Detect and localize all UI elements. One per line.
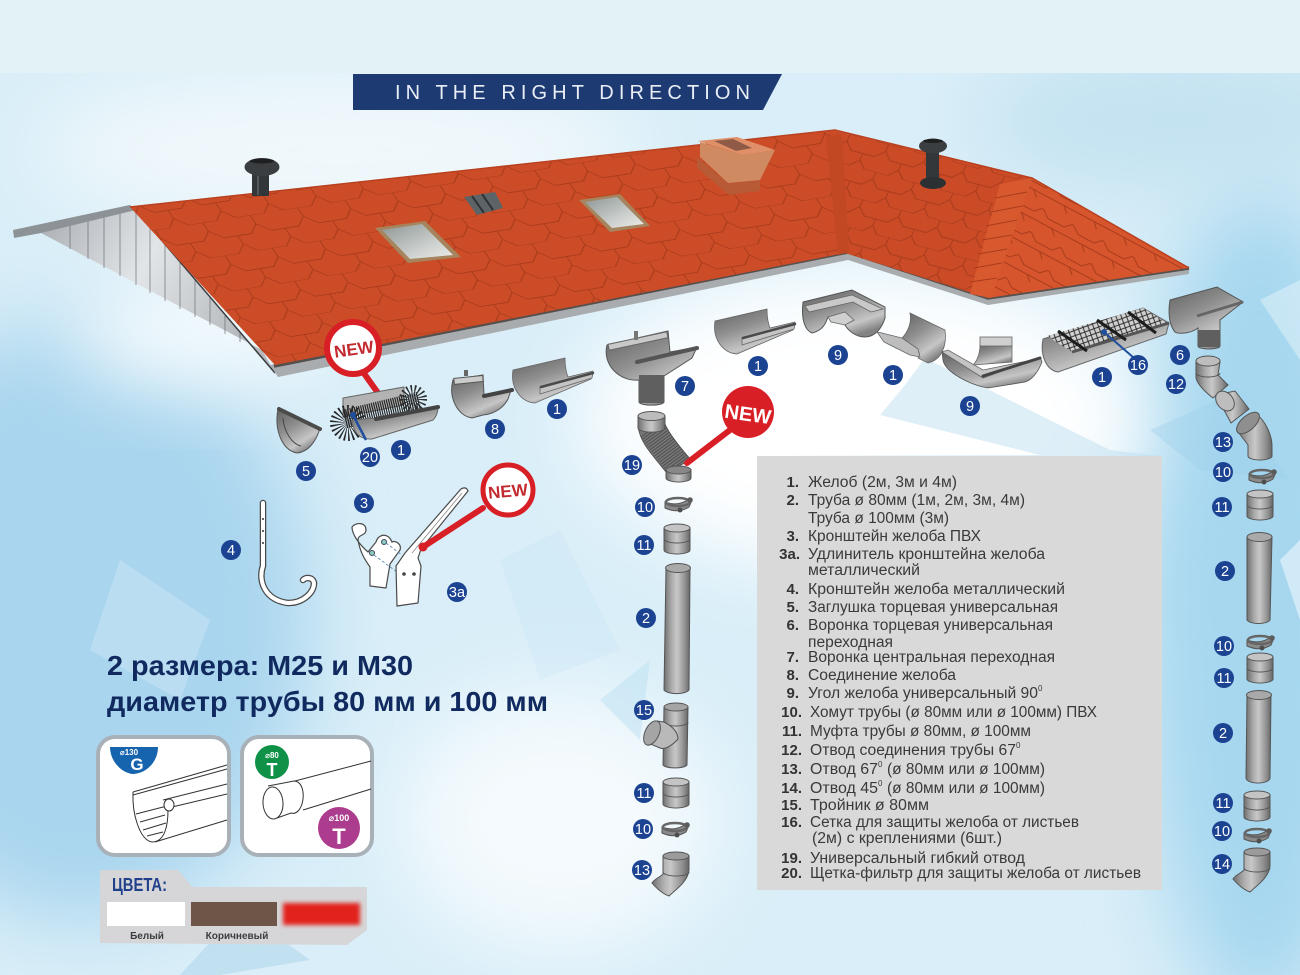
badge: G 130: G xyxy=(130,755,144,774)
badge 10 right middle: 10 xyxy=(1216,639,1232,655)
panel: parts legend: Заглушка торцевая универсальная xyxy=(808,599,1058,616)
left gable with standing seam metal xyxy=(13,205,275,373)
number badges xyxy=(221,345,1235,880)
badge: T 80 xyxy=(255,745,289,780)
panel: colours xyxy=(100,870,367,945)
panel: parts legend: Щетка-фильтр для защиты желоба от листьев xyxy=(810,865,1141,882)
badge 1 middle: 1 xyxy=(754,359,762,375)
badge 6 xyxy=(1170,345,1190,365)
badge 2 right lower xyxy=(1213,723,1233,743)
right roof vent xyxy=(919,138,947,189)
panel: parts legend: 12. xyxy=(781,742,802,759)
right column clamp middle xyxy=(1247,635,1275,650)
badge 1 net gutter: 1 xyxy=(1098,370,1106,386)
panel: parts legend: 15. xyxy=(781,797,802,814)
badge 2 right top xyxy=(1215,561,1235,581)
badge 3: 3 xyxy=(360,496,368,512)
badge 12 xyxy=(1166,374,1186,394)
panel: parts legend: Соединение желоба xyxy=(808,667,956,684)
badge: T 100 xyxy=(318,807,360,849)
panel: parts legend: 3а. xyxy=(779,546,800,563)
badge 1 brush gutter: 1 xyxy=(397,443,405,459)
panel: parts legend: Угол желоба универсальный 90 xyxy=(808,685,1038,702)
main roof slope with shingles xyxy=(130,130,845,365)
badge 16: 16 xyxy=(1130,358,1146,374)
badge 10 right lower xyxy=(1212,821,1232,841)
roof illustration xyxy=(13,130,1189,377)
PVC bracket xyxy=(352,524,402,588)
badge 13 left xyxy=(632,860,652,880)
badge 2 right lower: 2 xyxy=(1219,726,1227,742)
panel: parts legend: 1. xyxy=(786,474,799,491)
badge 10 left lower: 10 xyxy=(635,822,651,838)
left column coupling lower xyxy=(663,778,689,808)
panel: parts legend: Труба ø 100мм (3м) xyxy=(808,510,949,527)
panel: parts legend: Воронка центральная переходная xyxy=(808,649,1055,666)
angle piece right xyxy=(942,337,1042,388)
NEW badge pointing at extender: NEW xyxy=(487,480,529,503)
central funnel xyxy=(606,331,697,405)
right column downpipe upper xyxy=(1247,532,1272,624)
end cap xyxy=(277,409,320,453)
badge 15 xyxy=(634,700,654,720)
panel: parts legend: Муфта трубы ø 80мм, ø 100мм xyxy=(810,723,1031,740)
NEW badge with pointer to brush filter xyxy=(327,322,383,400)
left column coupling upper xyxy=(664,524,690,554)
NEW badge pointing at flexible elbow xyxy=(687,386,774,463)
badge 11 right top: 11 xyxy=(1214,500,1230,516)
badge 15: 15 xyxy=(636,703,652,719)
panel: parts legend: 11. xyxy=(782,723,802,740)
left column clamp xyxy=(665,497,693,512)
skylight right xyxy=(579,194,650,232)
NEW badge pointing at flexible elbow: NEW xyxy=(723,401,773,429)
left column clamp lower xyxy=(662,822,690,838)
swatch: white xyxy=(107,902,185,926)
badge 11 left lower xyxy=(634,783,654,803)
badge 8 xyxy=(485,419,505,439)
metal bracket extender xyxy=(396,488,468,606)
panel: parts legend: 19. xyxy=(781,850,802,867)
panel: parts legend: 0 xyxy=(878,760,883,769)
panel: parts legend: 0 xyxy=(878,779,883,788)
valley strip xyxy=(826,134,849,255)
badge 1 middle xyxy=(748,356,768,376)
panel: parts legend: Тройник ø 80мм xyxy=(810,797,929,814)
badge 8: 8 xyxy=(491,422,499,438)
panel: parts legend: 9. xyxy=(786,685,799,702)
heading: sizes and pipe diameters: 2 размера: M25 и M30 xyxy=(107,650,413,681)
gutter joint xyxy=(452,370,512,418)
ridge cap xyxy=(130,130,1189,268)
panel: parts legend: 8. xyxy=(786,667,799,684)
panel: parts legend: Кронштейн желоба ПВХ xyxy=(808,528,982,545)
NEW badge pointing at extender xyxy=(418,465,533,552)
flexible elbow xyxy=(638,412,691,482)
panel: parts legend: Труба ø 80мм (1м, 2м, 3м, 4м) xyxy=(808,492,1025,509)
tee fitting xyxy=(640,703,688,768)
badge 4: 4 xyxy=(227,543,235,559)
left column downpipe xyxy=(664,564,690,694)
heading: sizes and pipe diameters: диаметр трубы 80 мм и 100 мм xyxy=(107,686,548,717)
badge 14 xyxy=(1212,854,1232,874)
badge 5 xyxy=(296,461,316,481)
right column clamp xyxy=(1249,469,1277,484)
colour name: brown: Коричневый xyxy=(206,931,268,942)
panel: parts legend: 4. xyxy=(786,581,799,598)
badge 11 left top: 11 xyxy=(636,538,652,554)
heading: sizes and pipe diameters xyxy=(107,650,548,717)
right column coupling middle xyxy=(1247,653,1273,683)
right column coupling lower xyxy=(1244,791,1270,821)
badge: T 100: ⌀100 xyxy=(329,813,349,823)
right column downpipe lower xyxy=(1246,690,1272,783)
gutter section top middle xyxy=(715,309,795,354)
panel: parts legend: Сетка для защиты желоба от листьев xyxy=(810,814,1079,831)
badge 1 centre xyxy=(883,365,903,385)
badge 11 right middle xyxy=(1214,668,1234,688)
badge 19: 19 xyxy=(624,458,640,474)
badge 10 right top: 10 xyxy=(1215,465,1231,481)
badge 1 net gutter xyxy=(1092,367,1112,387)
panel: parts legend: Кронштейн желоба металлический xyxy=(808,581,1065,598)
NEW badge with pointer to brush filter: NEW xyxy=(333,337,376,362)
panel: parts legend: металлический xyxy=(808,562,920,579)
panel: parts legend: 10. xyxy=(781,704,802,721)
badge: T 80: ⌀80 xyxy=(265,751,279,760)
panel: gutter size 130 xyxy=(98,737,229,855)
badge 3a xyxy=(447,582,467,602)
panel: parts legend: 20. xyxy=(781,865,802,882)
badge 2 left: 2 xyxy=(642,611,650,627)
panel: parts legend: 16. xyxy=(781,814,802,831)
gutter section mirrored xyxy=(877,313,945,363)
badge 11 right lower: 11 xyxy=(1215,796,1231,812)
heading: colours: ЦВЕТА: xyxy=(112,875,167,895)
badge 2 left xyxy=(636,608,656,628)
swatch: brown xyxy=(191,902,277,926)
panel: parts legend: (2м) с креплениями (6шт.) xyxy=(812,830,1002,847)
panel: parts legend: 5. xyxy=(786,599,799,616)
badge 2 right top: 2 xyxy=(1221,564,1229,580)
badge 13 right xyxy=(1213,432,1233,452)
badge 9 right xyxy=(960,396,980,416)
badge 3a: 3a xyxy=(449,585,466,601)
badge 10 left lower xyxy=(633,819,653,839)
title banner: IN THE RIGHT DIRECTION xyxy=(395,82,750,104)
badge 20 xyxy=(360,447,380,467)
badge: G 130: ⌀130 xyxy=(120,748,139,757)
panel: parts legend: 7. xyxy=(786,649,799,666)
badge 7: 7 xyxy=(681,379,689,395)
badge 5: 5 xyxy=(302,464,310,480)
colour name: white: Белый xyxy=(130,931,164,942)
badge 12: 12 xyxy=(1168,377,1184,393)
gutter section near joint xyxy=(513,358,593,403)
badge 7 xyxy=(675,376,695,396)
end funnel xyxy=(1169,287,1243,349)
vent tile xyxy=(464,192,503,215)
badge 6: 6 xyxy=(1176,348,1184,364)
badge 4 xyxy=(221,540,241,560)
metal gutter hook xyxy=(261,503,314,603)
badge 10 left top: 10 xyxy=(637,500,653,516)
panel: parts legend: Отвод 45 xyxy=(810,780,878,797)
panel: parts legend xyxy=(757,456,1162,890)
panel: parts legend: 2. xyxy=(786,492,799,509)
badge 19 xyxy=(622,455,642,475)
panel: parts legend: 6. xyxy=(786,617,799,634)
panel: parts legend: Воронка торцевая универсальная xyxy=(808,617,1053,634)
badge 13 right: 13 xyxy=(1215,435,1231,451)
badge 9 left: 9 xyxy=(834,348,842,364)
panel: parts legend: переходная xyxy=(808,634,893,651)
panel: parts legend: (ø 80мм или ø 100мм) xyxy=(887,761,1045,778)
right column coupling xyxy=(1247,490,1273,520)
title banner xyxy=(353,74,782,110)
panel: parts legend: 0 xyxy=(1016,741,1021,750)
left roof vent xyxy=(244,158,280,196)
badge 11 left lower: 11 xyxy=(636,786,652,802)
badge 14: 14 xyxy=(1214,857,1230,873)
badge: T 80: T xyxy=(266,760,278,780)
panel: parts legend: Отвод 67 xyxy=(810,761,878,778)
panel: parts legend: 3. xyxy=(786,528,799,545)
eave metal trim xyxy=(270,252,1189,377)
panel: parts legend: Желоб (2м, 3м и 4м) xyxy=(808,474,957,491)
panel: parts legend: Удлинитель кронштейна желоба xyxy=(808,546,1045,563)
gutter with leaf guard net xyxy=(1042,308,1169,372)
panel: parts legend: Универсальный гибкий отвод xyxy=(810,850,1025,867)
badge 10 right top xyxy=(1213,462,1233,482)
badge 11 right lower xyxy=(1213,793,1233,813)
badge: G 130 xyxy=(110,747,158,774)
right roof slope with shingles xyxy=(832,130,1032,298)
badge 16 xyxy=(1128,355,1148,375)
badge: T 100: T xyxy=(332,824,346,849)
panel: parts legend: (ø 80мм или ø 100мм) xyxy=(887,780,1045,797)
diagonal connector xyxy=(1215,390,1250,424)
elbow below connector xyxy=(1236,412,1272,460)
right column clamp lower xyxy=(1244,828,1272,844)
left column 67 degree elbow xyxy=(652,852,689,896)
panel: parts legend: Отвод соединения трубы 67 xyxy=(810,742,1016,759)
right column 45 degree elbow xyxy=(1233,848,1270,892)
chimney xyxy=(697,137,775,195)
skylight left xyxy=(375,221,461,263)
panel: parts legend: 13. xyxy=(781,761,802,778)
gutter with brush filter xyxy=(339,387,438,440)
badge 13 left: 13 xyxy=(634,863,650,879)
badge 9 right: 9 xyxy=(966,399,974,415)
badge 10 right middle xyxy=(1214,636,1234,656)
badge 9 left xyxy=(828,345,848,365)
badge 11 right middle: 11 xyxy=(1216,671,1232,687)
badge 1 left xyxy=(547,399,567,419)
badge 1 centre: 1 xyxy=(889,368,897,384)
panel: pipe sizes 80 and 100 xyxy=(242,737,372,855)
panel: parts legend: 0 xyxy=(1038,684,1043,693)
badge 20: 20 xyxy=(362,450,378,466)
badge 1 left: 1 xyxy=(553,402,561,418)
badge 10 left top xyxy=(635,497,655,517)
badge 10 right lower: 10 xyxy=(1214,824,1230,840)
swatch: red xyxy=(283,903,360,925)
panel: parts legend: Хомут трубы (ø 80мм или ø 100мм) ПВХ xyxy=(810,704,1098,721)
badge 11 left top xyxy=(634,535,654,555)
angle piece left xyxy=(802,290,885,337)
badge 1 brush gutter xyxy=(391,440,411,460)
hip end slope xyxy=(970,178,1189,298)
icon: gutter line drawing xyxy=(133,765,227,842)
badge 3 xyxy=(354,493,374,513)
offset elbow at end funnel xyxy=(1196,356,1228,398)
panel: parts legend: 14. xyxy=(781,780,802,797)
icon: pipe line drawing xyxy=(262,761,371,820)
badge 11 right top xyxy=(1212,497,1232,517)
